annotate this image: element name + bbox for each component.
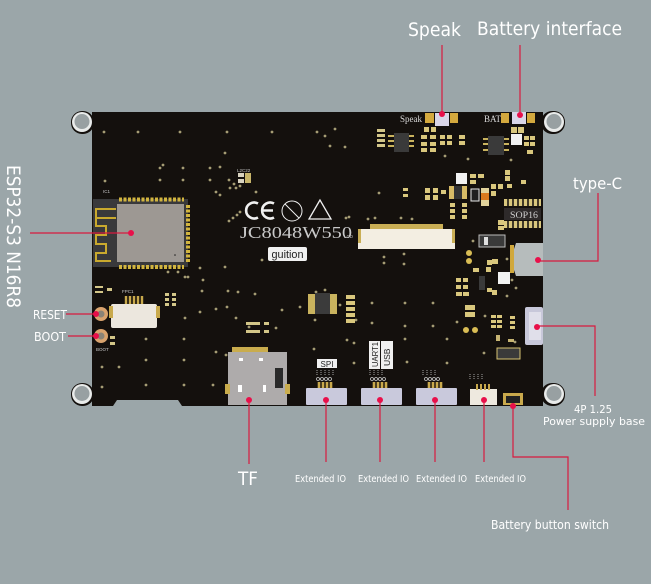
- pointer: BOOT: [68, 335, 96, 337]
- module: ESP32-S3: [93, 199, 188, 267]
- pointer dots: [93, 111, 541, 409]
- FPC1 connector: FPC1: [122, 289, 134, 294]
- label: Battery button switch: Battery button switch: [491, 518, 609, 532]
- SPI label: SPI: [321, 360, 333, 369]
- power section: [403, 170, 526, 230]
- pointer: Extended IO 2: [379, 400, 381, 462]
- chip U1: [308, 293, 355, 323]
- pointer: Battery interface: [519, 45, 521, 114]
- certification marks: [246, 200, 331, 221]
- pointer: Speak: [441, 45, 443, 114]
- battery connector: BAT: [484, 114, 502, 124]
- chip U8 area: [483, 127, 535, 155]
- label: 4P 1.25 Power supply base: Power supply base: [543, 415, 645, 428]
- pointer lines: [30, 45, 598, 510]
- LCD connector: [358, 224, 455, 249]
- battery connector: [484, 112, 535, 124]
- UART1 label: UART1: [370, 342, 380, 367]
- label: RESET: RESET: [33, 307, 67, 322]
- RESET pad: [94, 307, 108, 321]
- component D: diode: [479, 235, 505, 247]
- label: TF: TF: [237, 468, 258, 490]
- chip SOP16: [504, 199, 541, 228]
- test pads and inductor: [456, 250, 515, 329]
- label: Extended IO 1: Extended IO: [295, 474, 346, 485]
- text: IC1 silkscreen: IC1: [103, 189, 110, 194]
- label: Extended IO 4: Extended IO: [475, 474, 526, 485]
- logo badge: guition: [272, 249, 304, 261]
- chip U4 area: [377, 127, 465, 152]
- pointer: RESET: [66, 313, 96, 315]
- label: Battery interface: Battery interface: [477, 18, 622, 40]
- speaker connector: Speak: [400, 114, 422, 124]
- USB type-C port: [510, 243, 543, 276]
- pointer: Extended IO 4: [483, 400, 485, 462]
- label: Speak: Speak: [408, 19, 461, 41]
- pointer: Extended IO 3: [434, 400, 436, 462]
- extended IO connector 2: [361, 382, 402, 405]
- 4P power supply connector: [525, 307, 543, 345]
- label: ESP32-S3 N16R8: ESP32-S3 N16R8: [2, 165, 24, 308]
- label: 4P 1.25 Power supply base: [543, 403, 645, 428]
- SPI label: [317, 359, 337, 369]
- chip SOP16: SOP16: [510, 210, 539, 220]
- component: L2C22: [237, 168, 251, 183]
- USB label: USB: [382, 348, 392, 366]
- component: L2C22: L2C22: [237, 168, 251, 173]
- circuit board: [71, 111, 565, 406]
- model number: JC8048W550: [240, 223, 352, 242]
- text: LCD silkscreen: LCD: [344, 234, 354, 239]
- label: Extended IO 3: Extended IO: [416, 474, 467, 485]
- label: BOOT: BOOT: [34, 329, 66, 344]
- BOOT pad: BOOT: [96, 347, 109, 352]
- USB label: [381, 341, 393, 369]
- pointer: power base: [537, 326, 595, 396]
- battery button switch: [503, 393, 523, 405]
- MOSFET and test points: [463, 327, 520, 359]
- label: type-C: type-C: [573, 174, 622, 193]
- silkscreen pin marks: [316, 370, 482, 380]
- extended IO connector 1: [306, 382, 347, 405]
- small resistors near FPC: [95, 286, 269, 345]
- BOOT pad: [94, 329, 109, 352]
- extended IO connector 4: [470, 384, 497, 405]
- pointer: ESP32: [30, 232, 131, 234]
- pointer: type-C: [538, 193, 598, 261]
- label: Extended IO 2: Extended IO: [358, 474, 409, 485]
- pointer: Extended IO 1: [325, 400, 327, 462]
- TF card slot: [225, 347, 290, 405]
- board vias: [101, 128, 529, 388]
- pointer: TF: [248, 400, 250, 464]
- label: 4P 1.25 Power supply base: 4P 1.25: [574, 403, 612, 416]
- pointer: Battery button: [513, 405, 568, 510]
- FPC1 connector: [109, 289, 160, 328]
- speaker connector: [400, 113, 458, 126]
- extended IO connector 3: [416, 382, 457, 405]
